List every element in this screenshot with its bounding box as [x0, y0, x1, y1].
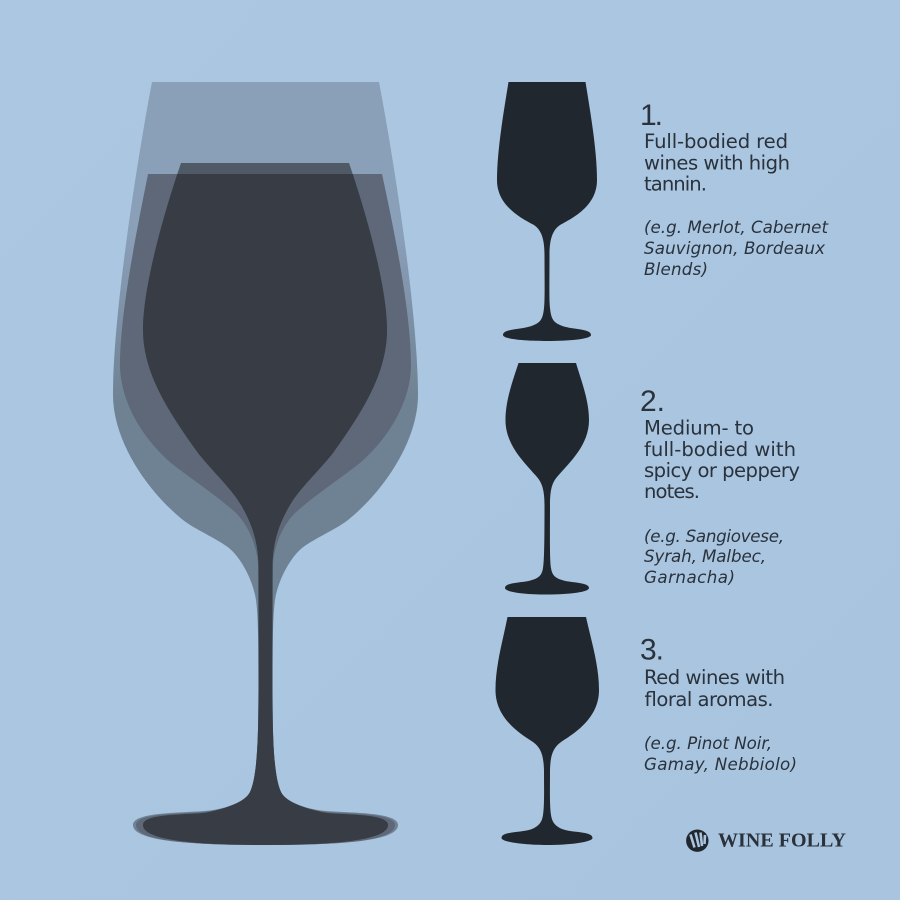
- text block: glass 3 description: Red wines with: [644, 666, 785, 689]
- text block: glass 2 description: (e.g. Sangiovese,: [644, 526, 784, 546]
- logo: Wine Folly: [686, 830, 847, 852]
- text block: glass 3 description: [640, 634, 797, 774]
- overlaid glass comparison: [113, 82, 418, 845]
- text block: glass 2 description: Medium- to: [644, 416, 754, 440]
- icon: glass 2 silhouette: [505, 363, 589, 594]
- wordmark: WINE FOLLY: [718, 830, 847, 852]
- text block: glass 3 description: Gamay, Nebbiolo): [644, 754, 797, 774]
- text block: glass 2 description: full-bodied with: [644, 438, 796, 461]
- icon: logo roundel: [686, 830, 708, 852]
- text block: glass 3 description: 3.: [640, 634, 664, 666]
- text block: glass 1 description: tannin.: [644, 172, 707, 196]
- text block: glass 1 description: [640, 99, 829, 279]
- text block: glass 2 description: 2.: [640, 385, 665, 418]
- text block: glass 2 description: Garnacha): [644, 567, 735, 587]
- text block: glass 1 description: Sauvignon, Bordeaux: [644, 238, 826, 258]
- icon: glass 1 silhouette: [497, 82, 597, 341]
- text block: glass 2 description: [640, 385, 800, 587]
- text block: glass 2 description: spicy or peppery: [644, 459, 800, 482]
- icon: glass 3 silhouette: [496, 617, 599, 845]
- overlap of all glasses: [143, 163, 388, 845]
- glass outline: tall glass 1: [113, 82, 418, 845]
- text block: glass 3 description: floral aromas.: [645, 688, 774, 711]
- text block: glass 1 description: 1.: [640, 99, 663, 132]
- text block: glass 1 description: Full-bodied red: [644, 130, 788, 153]
- text block: glass 1 description: (e.g. Merlot, Cabernet: [644, 217, 829, 237]
- text block: glass 1 description: Blends): [644, 259, 708, 279]
- text block: glass 2 description: notes.: [644, 480, 700, 503]
- glass outline: wide glass 3: [120, 174, 411, 845]
- text block: glass 1 description: wines with high: [644, 152, 790, 174]
- glass outline: narrow glass 2: [143, 163, 388, 845]
- infographic canvas: [113, 82, 846, 852]
- text block: glass 2 description: Syrah, Malbec,: [644, 546, 766, 566]
- text block: glass 3 description: (e.g. Pinot Noir,: [644, 733, 772, 753]
